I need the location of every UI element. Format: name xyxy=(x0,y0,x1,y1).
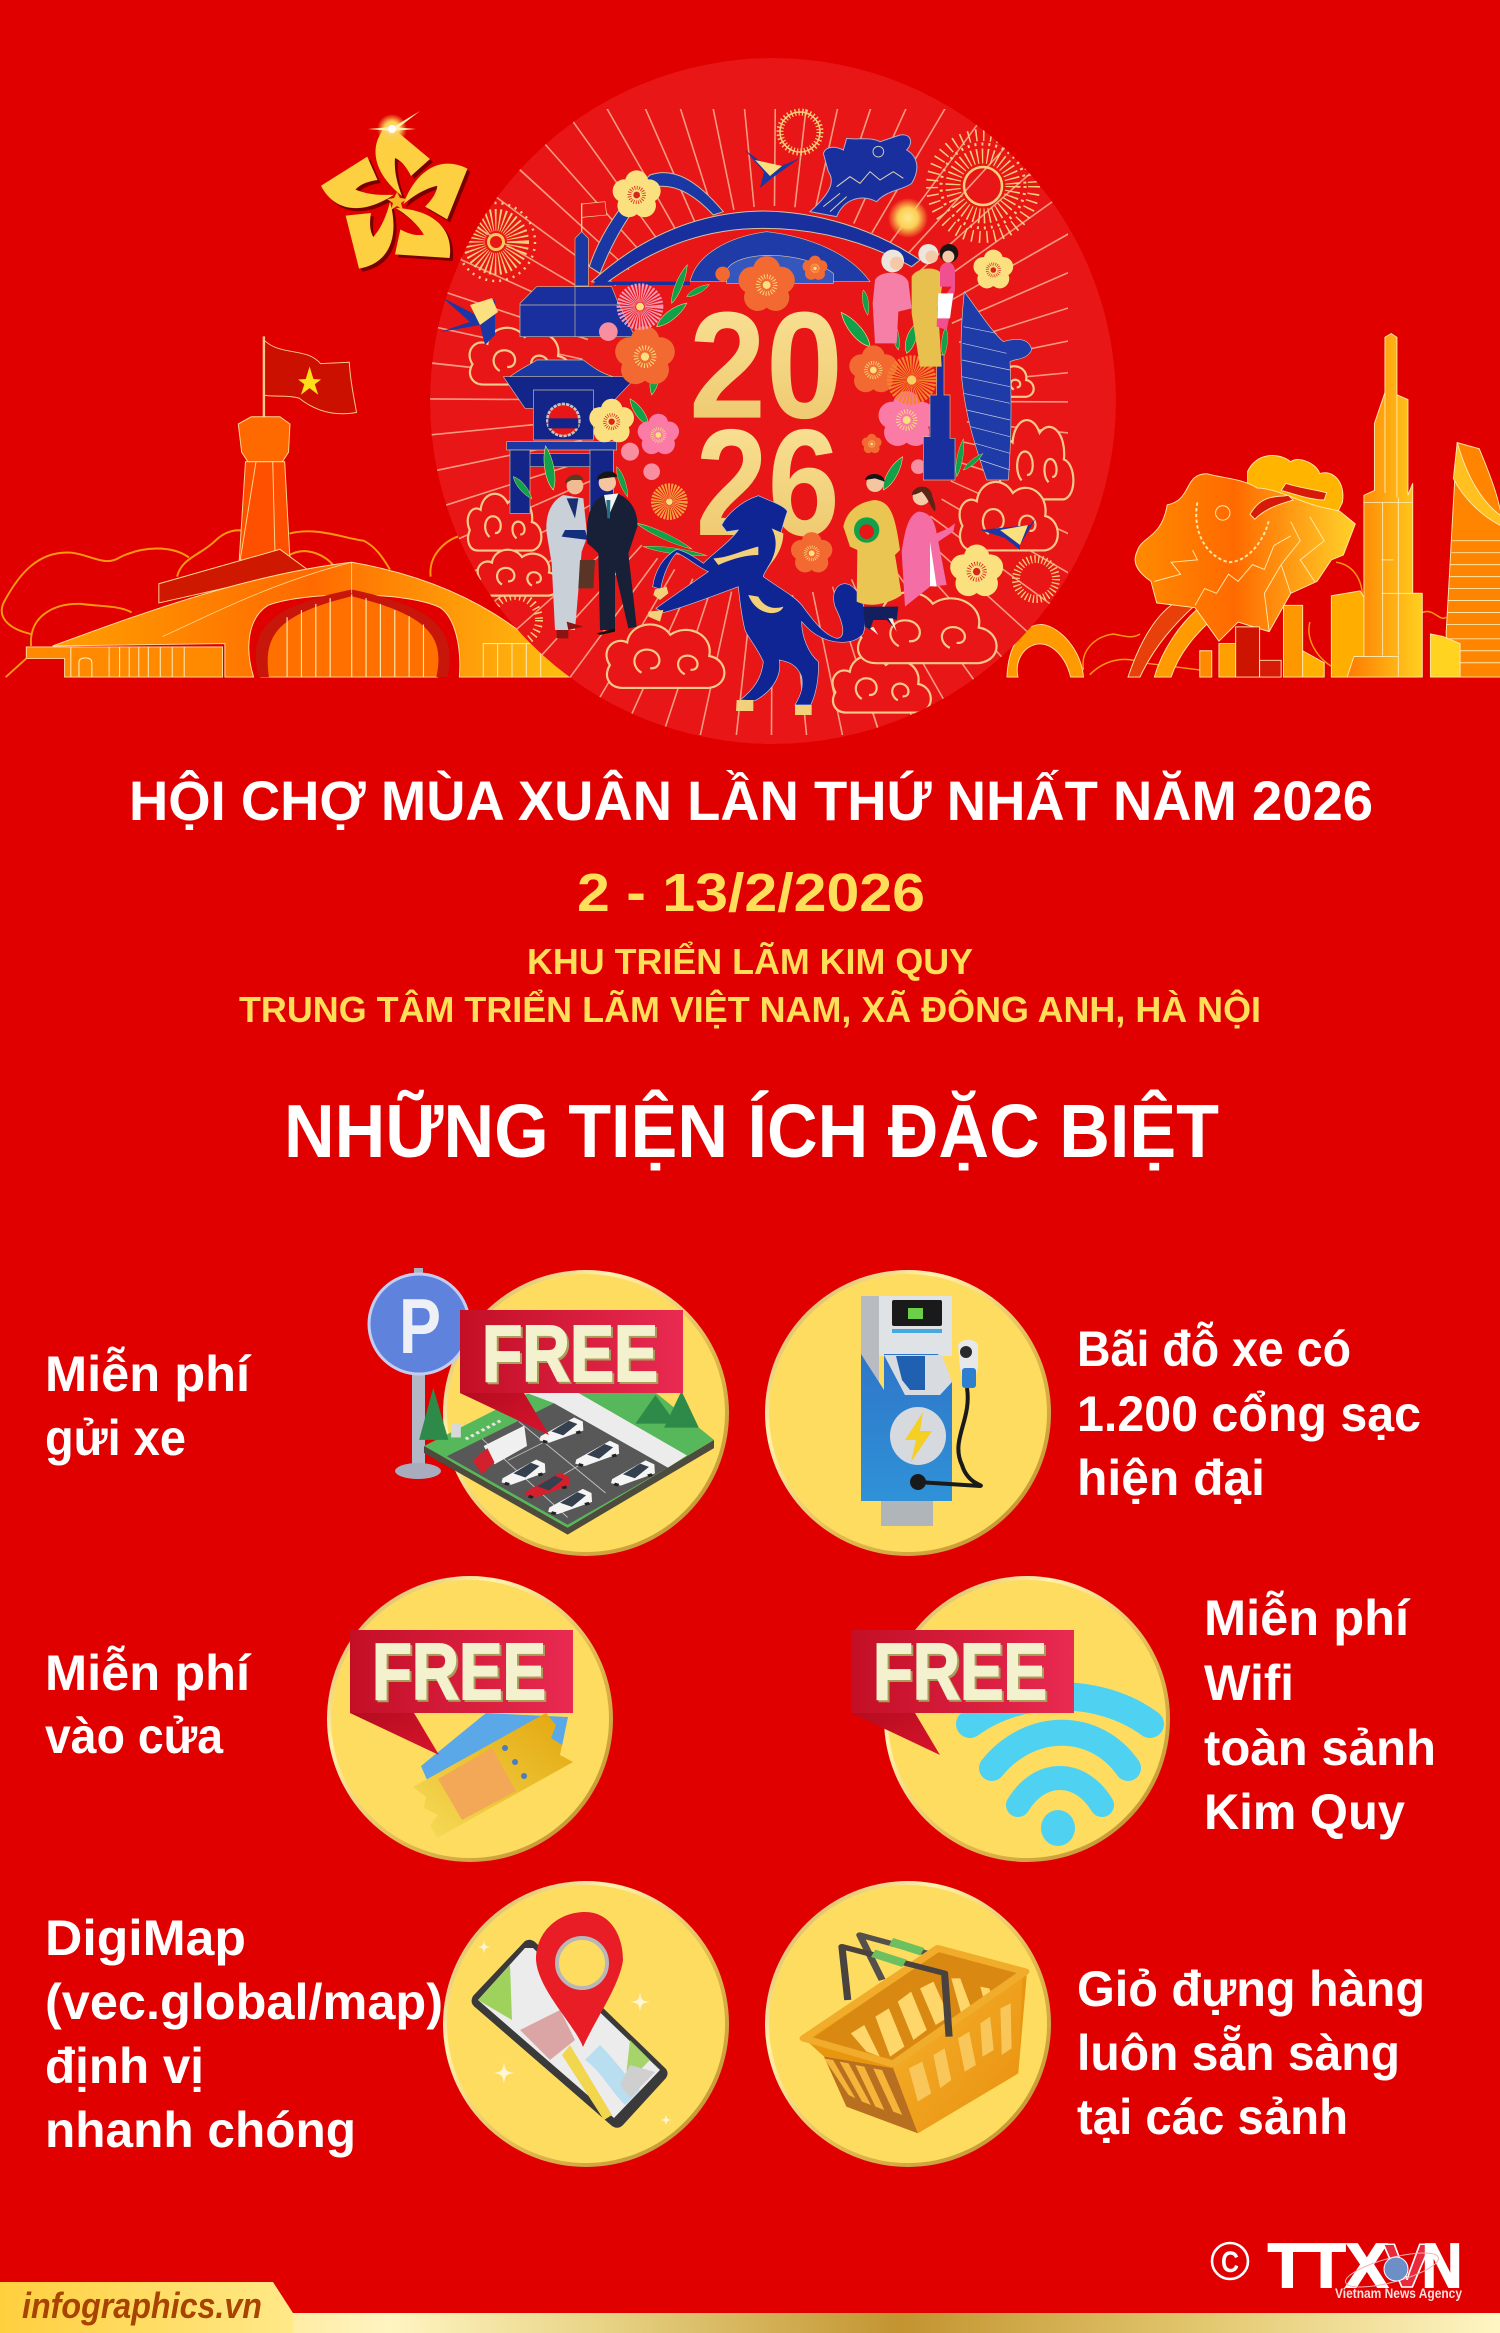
item: free wifi text: toàn sảnh xyxy=(1204,1720,1436,1776)
agency wordmark: V xyxy=(1383,2232,1431,2301)
back handle xyxy=(860,1935,985,2015)
logo centre xyxy=(387,192,407,210)
date: 2 - 13/2/2026 xyxy=(577,863,925,923)
copyright symbol xyxy=(1212,2243,1248,2279)
free banner: FREE xyxy=(372,1627,546,1716)
item: free wifi text: Kim Quy xyxy=(1204,1784,1405,1840)
item: basket text: luôn sẵn sàng xyxy=(1077,2024,1400,2081)
site tab xyxy=(0,2282,293,2333)
item: DigiMap text: nhanh chóng xyxy=(45,2102,356,2158)
horse xyxy=(653,496,865,705)
item: free wifi text: Wifi xyxy=(1204,1655,1294,1711)
dragon head xyxy=(1128,455,1355,677)
free banner: FREE xyxy=(374,1629,548,1718)
landmark tower xyxy=(1347,334,1422,677)
item: DigiMap text: DigiMap xyxy=(45,1910,246,1966)
title: HỘI CHỢ MÙA XUÂN LẦN THỨ NHẤT NĂM 2026 xyxy=(129,769,1373,832)
logo shadow xyxy=(320,127,483,286)
lower figures and horse xyxy=(546,471,1006,715)
year digits: 20 xyxy=(689,281,843,451)
phone with map xyxy=(472,1940,668,2128)
coin xyxy=(765,1270,1051,1556)
businessman grey xyxy=(546,475,595,638)
item: free parking text: gửi xe xyxy=(45,1410,186,1466)
cable and connector xyxy=(910,1340,981,1490)
flag xyxy=(263,336,356,418)
arch xyxy=(592,211,920,284)
logo: gold five-petal apricot blossom xyxy=(317,111,483,286)
dome hall xyxy=(690,232,870,282)
item: charging text: Bãi đỗ xe có xyxy=(1077,1321,1351,1377)
sun rays xyxy=(503,131,1043,671)
cloud outlines xyxy=(2,530,459,646)
wifi symbol xyxy=(970,1696,1150,1846)
item: free entry text: Miễn phí xyxy=(45,1645,252,1701)
item: free wifi text: Miễn phí xyxy=(1204,1590,1411,1646)
horse gold details xyxy=(648,528,812,715)
basket body xyxy=(804,1947,1027,2133)
free banner xyxy=(851,1627,1074,1755)
item: charging text xyxy=(1077,1321,1421,1506)
agency wordmark: N xyxy=(1422,2232,1462,2301)
bolt badge xyxy=(890,1407,946,1465)
arch gate xyxy=(1007,624,1084,677)
parking sign: P xyxy=(399,1282,441,1370)
item: charging station icon xyxy=(765,1270,1051,1556)
front handle xyxy=(842,1947,949,2037)
parking sign xyxy=(369,1268,469,1479)
item: DigiMap icon xyxy=(443,1881,729,2167)
coin xyxy=(765,1881,1051,2167)
item: basket text: tại các sảnh xyxy=(1077,2089,1348,2145)
left skyline: flag tower and hall xyxy=(2,336,569,677)
item: charging text: hiện đại xyxy=(1077,1450,1265,1506)
globe xyxy=(1343,2246,1441,2294)
item: free parking icon xyxy=(369,1268,729,1556)
venue line 2: TRUNG TÂM TRIỂN LÃM VIỆT NAM, XÃ ĐÔNG ANH, HÀ NỘI xyxy=(239,988,1261,1030)
fireworks xyxy=(457,112,1056,644)
flag post tower xyxy=(520,202,635,337)
financial tower xyxy=(1430,443,1500,677)
item: free wifi icon xyxy=(851,1576,1170,1862)
charger body xyxy=(861,1296,952,1526)
temple xyxy=(503,360,637,513)
family xyxy=(873,244,958,367)
item: basket icon xyxy=(765,1881,1051,2167)
free banner: FREE xyxy=(875,1629,1049,1718)
item: DigiMap text: định vị xyxy=(45,2038,204,2094)
blossoms xyxy=(587,170,1016,513)
businessman dark xyxy=(587,471,637,635)
year digits xyxy=(694,312,838,536)
low buildings xyxy=(1200,591,1367,677)
agency tagline: Vietnam News Agency xyxy=(1335,2286,1462,2301)
logo petals xyxy=(317,124,480,283)
ticket xyxy=(413,1713,573,1838)
free banner xyxy=(350,1627,573,1755)
low cloud outlines xyxy=(1083,562,1446,675)
item: free wifi text xyxy=(1204,1590,1436,1840)
coin xyxy=(327,1576,613,1862)
item: free parking text: Miễn phí xyxy=(45,1346,252,1402)
site name: infographics.vn xyxy=(22,2285,262,2326)
central red disc xyxy=(667,293,880,507)
item: DigiMap text xyxy=(45,1910,443,2158)
basket xyxy=(804,1935,1027,2133)
dragon tail arc xyxy=(589,173,723,273)
hero medallion xyxy=(430,58,1116,744)
item: free entry text xyxy=(45,1645,252,1764)
copyright mark and TTXVN logo xyxy=(1212,2232,1462,2301)
year digits: 26 xyxy=(696,398,840,568)
free banner: FREE xyxy=(873,1627,1047,1716)
free banner: FREE xyxy=(484,1311,660,1400)
coin xyxy=(884,1576,1170,1862)
man in ao dai xyxy=(843,474,902,635)
item: free entry text: vào cửa xyxy=(45,1708,224,1764)
Bitexco tower xyxy=(961,292,1032,480)
blue arch and dome xyxy=(503,135,1032,568)
item: basket text xyxy=(1077,1961,1425,2145)
exhibition hall xyxy=(6,562,569,677)
agency wordmark: TTX xyxy=(1268,2232,1388,2301)
map pin xyxy=(536,1912,623,2047)
isometric car park xyxy=(419,1379,714,1535)
item: basket text: Giỏ đựng hàng xyxy=(1077,1961,1425,2017)
agency wordmark xyxy=(1268,2232,1462,2301)
woman in ao dai xyxy=(902,487,955,607)
sparkles xyxy=(477,1940,672,2126)
item: free entry icon xyxy=(327,1576,613,1862)
item: DigiMap text: (vec.global/map) xyxy=(45,1974,443,2030)
copyright symbol: C xyxy=(1221,2246,1239,2279)
outline clouds xyxy=(468,328,1073,713)
section heading: NHỮNG TIỆN ÍCH ĐẶC BIỆT xyxy=(284,1089,1219,1173)
free banner xyxy=(460,1309,683,1435)
leaves xyxy=(511,263,984,558)
sparkle xyxy=(368,111,420,144)
right skyline: dragon bridge and towers xyxy=(1007,334,1500,677)
footer gold strip xyxy=(0,2282,1500,2333)
item: charging text: 1.200 cổng sạc xyxy=(1077,1386,1421,1442)
dragon head xyxy=(810,135,917,217)
landmark tower blue xyxy=(923,355,955,480)
flag tower xyxy=(159,417,307,603)
item: free parking text xyxy=(45,1346,252,1466)
venue line 1: KHU TRIỂN LÃM KIM QUY xyxy=(527,940,973,982)
strip xyxy=(0,2313,1500,2333)
coin xyxy=(443,1270,729,1556)
swallows xyxy=(440,150,1036,550)
free banner: FREE xyxy=(482,1309,658,1398)
coin xyxy=(443,1881,729,2167)
